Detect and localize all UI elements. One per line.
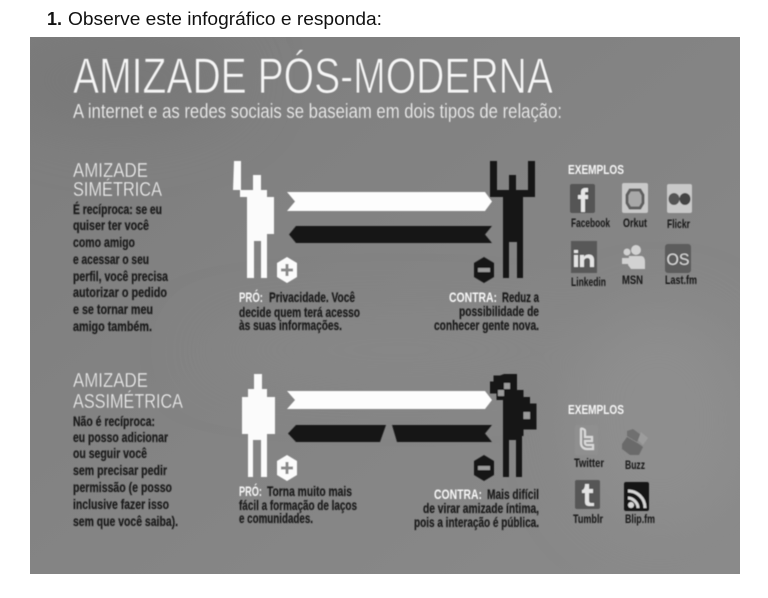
panel: amizade assimétrica (73, 370, 655, 530)
text block: simétrica description (73, 201, 168, 334)
icon: white figure with arm raised (233, 161, 274, 278)
text block: contra simétrica: possibilidade de (459, 303, 539, 319)
text block: pró simétrica: às suas informações. (239, 317, 342, 333)
icon: buzz: Buzz (625, 458, 645, 472)
icon: orkut (622, 183, 648, 230)
icon: last.fm: Last.fm (665, 273, 697, 287)
text block: simétrica description: e acessar o seu (73, 251, 149, 267)
text block: contra simétrica (434, 289, 539, 333)
text block: contra assimétrica: pois a interação é pública. (414, 514, 539, 530)
icon: orkut: Orkut (623, 216, 647, 230)
title: AMIZADE PÓS-MODERNA (73, 48, 553, 104)
icon: blip.fm: Blip.fm (625, 512, 655, 526)
text block: assimétrica description (73, 413, 178, 529)
infographic content (73, 48, 697, 530)
icon: buzz (622, 429, 648, 472)
icon: tumblr (573, 480, 603, 526)
icon: tumblr: Tumblr (573, 512, 603, 526)
question heading: 1. (47, 9, 62, 29)
icon: twitter: Twitter (574, 456, 604, 470)
icon: facebook (570, 184, 610, 230)
heading: amizade simétrica: AMIZADE (73, 160, 148, 182)
text block: assimétrica description: inclusive fazer isso (73, 496, 169, 512)
arrow: black left (289, 226, 492, 243)
text block: pró assimétrica: PRÓ: (239, 482, 262, 499)
text block: simétrica description: e se tornar meu (73, 301, 153, 317)
text block: assimétrica description: Não é recíproca: (73, 413, 155, 429)
text block: pró assimétrica: e comunidades. (239, 510, 313, 526)
icon: white standing figure (242, 374, 275, 477)
subtitle: A internet e as redes sociais se baseiam em dois tipos de relação: (73, 101, 562, 123)
icon: blip.fm (624, 482, 655, 526)
heading: exemplos: EXEMPLOS (568, 163, 624, 177)
text block: contra assimétrica: CONTRA: (434, 486, 482, 502)
icon: flickr (667, 184, 692, 231)
text block: pró simétrica: PRÓ: (239, 288, 263, 305)
text block: pró simétrica: Privacidade. Você (269, 289, 355, 305)
text block: assimétrica description: sem que você saiba). (73, 513, 178, 529)
icon: minus badge (474, 257, 494, 283)
text block: assimétrica description: permissão (e posso (73, 479, 172, 495)
text block: assimétrica description: eu posso adicionar (73, 429, 168, 445)
text block: simétrica description: como amigo (73, 234, 135, 250)
text block: simétrica description: É recíproca: se eu (73, 201, 162, 217)
icon: msn (622, 245, 645, 287)
icon: twitter (574, 425, 604, 470)
text block: pró simétrica (239, 288, 360, 333)
heading: amizade assimétrica: AMIZADE (73, 370, 148, 392)
text block: pró assimétrica: fácil a formação de laços (239, 497, 357, 513)
text block: assimétrica description: ou seguir você (73, 445, 147, 461)
text block: contra assimétrica: Mais difícil (487, 486, 539, 502)
heading: amizade simétrica (73, 160, 163, 201)
icon: linkedin (571, 241, 606, 289)
text block: pró assimétrica (239, 482, 357, 526)
heading: amizade assimétrica: ASSIMÉTRICA (73, 390, 184, 413)
heading: amizade simétrica: SIMÉTRICA (73, 178, 163, 201)
icon: last.fm: OS (666, 250, 690, 269)
icon: linkedin: Linkedin (571, 275, 606, 289)
icon: msn: MSN (622, 273, 643, 287)
icon: plus badge (277, 257, 297, 283)
heading: exemplos: EXEMPLOS (568, 403, 624, 417)
text block: assimétrica description: sem precisar pedir (73, 462, 167, 478)
icon: flickr: Flickr (667, 217, 690, 231)
text block: simétrica description: quiser ter você (73, 217, 149, 233)
text block: pró assimétrica: Torna muito mais (267, 483, 352, 499)
icon: facebook: Facebook (571, 216, 610, 230)
question heading: Observe este infográfico e responda: (68, 9, 382, 29)
icon: black figure with both arms raised (490, 161, 535, 278)
arrow: white right (287, 192, 492, 211)
panel: amizade simétrica (73, 160, 697, 334)
icon: plus badge (277, 455, 297, 481)
text block: simétrica description: autorizar o pedido (73, 284, 167, 300)
text block: contra simétrica: Reduz a (502, 289, 539, 305)
arrow: black left, broken (288, 425, 492, 442)
heading: amizade assimétrica (73, 370, 184, 413)
text block: contra simétrica: CONTRA: (449, 289, 497, 305)
text block: contra simétrica: conhecer gente nova. (434, 317, 539, 333)
text block: simétrica description: perfil, você precisa (73, 268, 168, 284)
icon: black pixel figure seen from the side (490, 374, 536, 477)
text block: contra assimétrica (414, 486, 539, 530)
icon: minus badge (474, 455, 494, 481)
icon: last.fm (665, 244, 697, 287)
text block: pró simétrica: decide quem terá acesso (239, 304, 360, 320)
text block: simétrica description: amigo também. (73, 318, 152, 334)
arrow: white right (287, 391, 492, 409)
text block: contra assimétrica: de virar amizade íntima, (423, 500, 539, 516)
